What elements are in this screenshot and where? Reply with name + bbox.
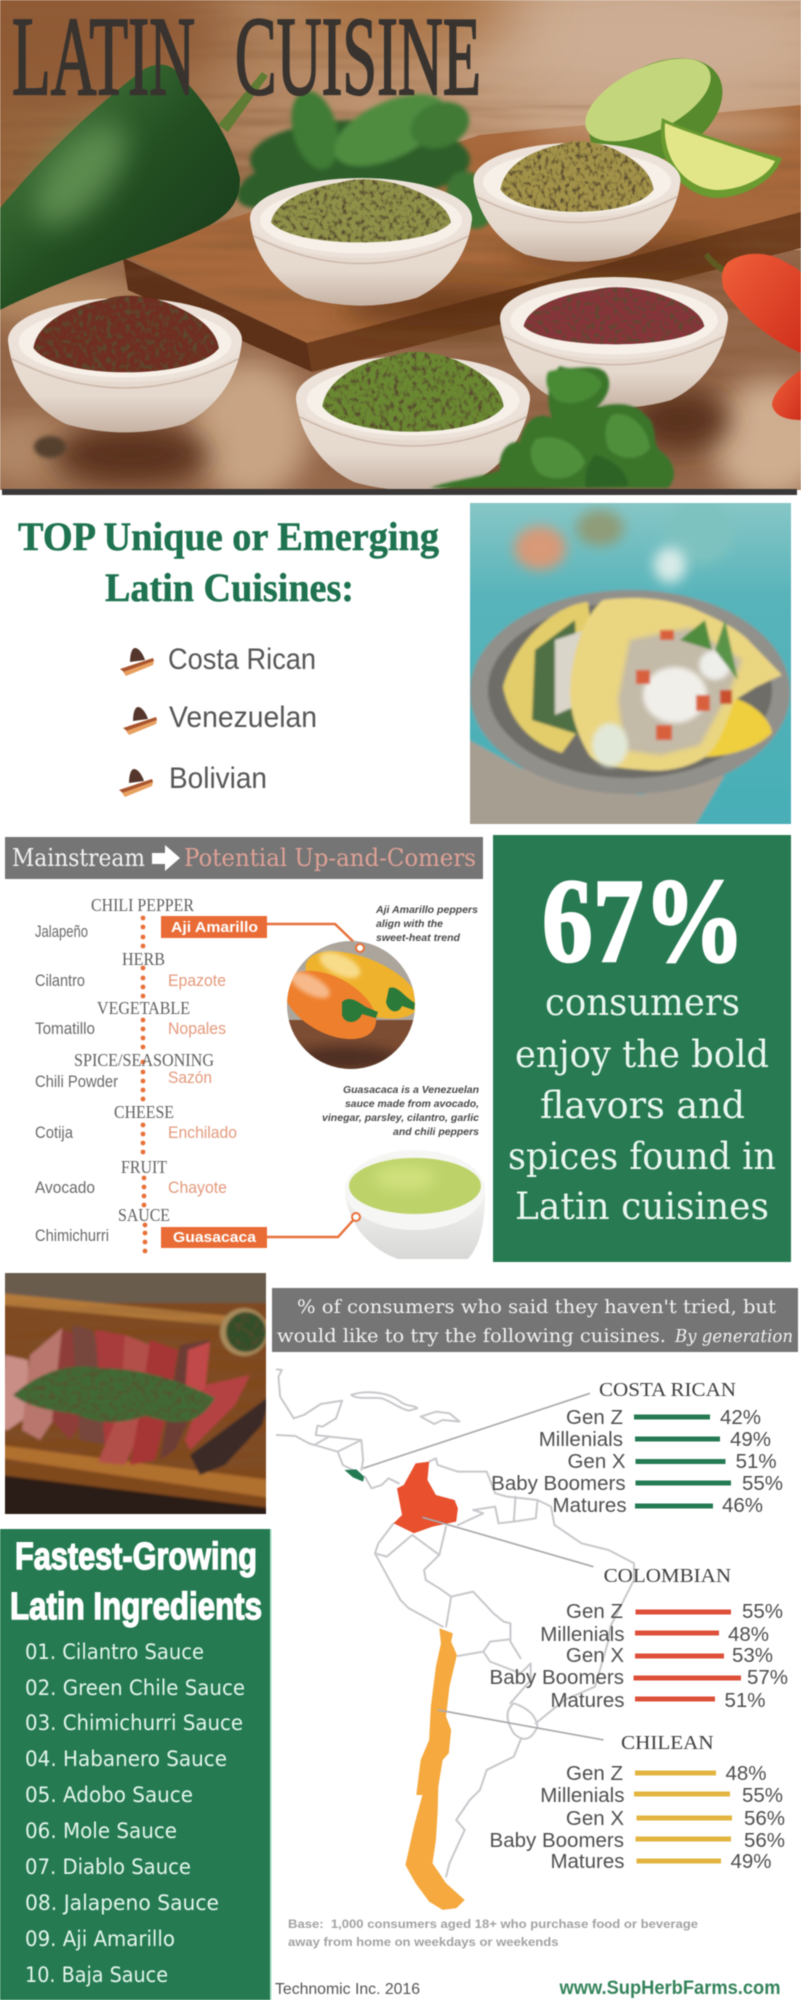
- list: emerging cuisines: [119, 643, 317, 797]
- annotation: Guasacaca: sauce made from avocado,: [345, 1098, 479, 1110]
- item: Venezuelan: Venezuelan: [169, 701, 317, 734]
- lime half: [584, 58, 724, 160]
- mainstream ingredient column: Avocado: [35, 1178, 95, 1197]
- arrow icon: [152, 845, 180, 871]
- stat caption: spices found in: [508, 1135, 776, 1178]
- chart: Colombian: Baby Boomers: [490, 1666, 624, 1689]
- ranked list: 03. Chimichurri Sauce: [25, 1711, 243, 1735]
- up-and-comer ingredient column: Enchilado: [168, 1123, 237, 1142]
- icon: sombrero 3: [119, 769, 153, 797]
- chart: Costa Rican: Gen Z: [566, 1406, 623, 1429]
- annotation: Aji Amarillo: [375, 904, 478, 944]
- item: Costa Rican: Costa Rican: [168, 643, 316, 676]
- lime wedge: [661, 118, 782, 198]
- header bar: consumers by generation: would like to try the following cuisines.: [277, 1325, 666, 1347]
- chart: Chilean: Millenials: [540, 1784, 624, 1807]
- chart: Colombian: 53%: [732, 1644, 773, 1667]
- chart: Costa Rican: 55%: [742, 1472, 783, 1495]
- herb leaves behind bowls: [236, 88, 490, 232]
- heading: top unique or emerging cuisines: [18, 514, 439, 610]
- cilantro sprig: [430, 366, 674, 488]
- chart: Chilean: 49%: [730, 1850, 772, 1873]
- bowl: bottom green sauce: [296, 352, 530, 490]
- bowl: right chili sauce: [500, 277, 728, 408]
- mainstream ingredient column: [35, 922, 118, 1245]
- header bar: mainstream to up-and-comers: Potential Up-and-Comers: [184, 844, 476, 872]
- chart: Costa Rican: 42%: [720, 1406, 761, 1429]
- icon: sombrero 1: [120, 648, 154, 676]
- chart: Costa Rican: Matures: [553, 1494, 627, 1517]
- Costa Rica highlighted: [344, 1469, 364, 1482]
- dotted timeline: [141, 916, 147, 1253]
- category labels: SAUCE: [118, 1205, 170, 1225]
- chart: Costa Rican: Baby Boomers: [491, 1472, 626, 1495]
- poblano pepper: [0, 65, 268, 310]
- ranked list: 01. Cilantro Sauce: [25, 1640, 204, 1664]
- up-and-comer ingredient column: Epazote: [168, 971, 226, 990]
- wooden board: [123, 105, 801, 372]
- chart: Costa Rican: 49%: [730, 1428, 771, 1451]
- annotation: Guasacaca: Guasacaca is a Venezuelan: [343, 1084, 479, 1096]
- category labels: FRUIT: [121, 1157, 167, 1177]
- ranked list: 02. Green Chile Sauce: [25, 1676, 245, 1700]
- annotation: Aji Amarillo: sweet-heat trend: [376, 932, 461, 944]
- chart: Costa Rican: 46%: [722, 1494, 763, 1517]
- stat number: 67%: [542, 854, 745, 987]
- map: Latin America: [277, 1369, 634, 1910]
- chart: Costa Rican: Gen X: [567, 1450, 626, 1473]
- chart: Colombian: 55%: [742, 1600, 783, 1623]
- mainstream ingredient column: Tomatillo: [35, 1019, 95, 1038]
- annotation: Guasacaca: and chili peppers: [393, 1126, 479, 1138]
- title: LATIN CUISINE: [12, 18, 480, 97]
- base note: Base: 1,000 consumers aged 18+ who purchase food or beverage: [288, 1919, 698, 1931]
- leader lines: [363, 1393, 604, 1740]
- category labels: [74, 895, 214, 1225]
- callout: Aji Amarillo: [161, 916, 360, 948]
- chart: Chilean: CHILEAN: [621, 1732, 714, 1754]
- stat caption: [508, 981, 776, 1228]
- up-and-comer ingredient column: Chayote: [168, 1178, 227, 1197]
- chart: Chilean: [490, 1732, 785, 1873]
- chart: Colombian: 57%: [747, 1666, 788, 1689]
- ranked list: 05. Adobo Sauce: [25, 1783, 193, 1807]
- stat caption: consumers: [545, 981, 740, 1024]
- panel heading: Latin Ingredients: [10, 1586, 262, 1628]
- up-and-comer ingredient column: Nopales: [168, 1019, 226, 1038]
- header bar: mainstream to up-and-comers: Mainstream: [12, 844, 145, 872]
- Colombia highlighted: [394, 1462, 458, 1533]
- ranked list: [25, 1640, 245, 1987]
- chart: Costa Rican: [491, 1379, 783, 1517]
- up-and-comer ingredient column: Sazón: [168, 1068, 212, 1087]
- bowl: top right: [474, 141, 680, 262]
- chart: Chilean: 56%: [744, 1807, 785, 1830]
- chart: Chilean: 56%: [744, 1829, 785, 1852]
- mainstream ingredient column: Cilantro: [35, 971, 85, 990]
- chart: Chilean: Gen Z: [566, 1762, 623, 1785]
- hero photo: sauces on a wooden board: [0, 0, 801, 502]
- chart: Colombian: Millenials: [540, 1623, 624, 1646]
- header bar: mainstream to up-and-comers: [5, 837, 483, 879]
- chart: Costa Rican: COSTA RICAN: [599, 1379, 736, 1401]
- table surface: [0, 0, 801, 502]
- photo: bowl of guasacaca: [345, 1150, 485, 1259]
- category labels: CHEESE: [114, 1102, 174, 1122]
- icon: sombrero 2: [123, 707, 157, 735]
- annotation: Guasacaca: vinegar, parsley, cilantro, garlic: [322, 1112, 479, 1124]
- ranked list: 04. Habanero Sauce: [25, 1747, 227, 1771]
- header bar: consumers by generation: [272, 1288, 798, 1352]
- panel heading: [10, 1536, 262, 1628]
- website: www.SupHerbFarms.com: [559, 1978, 780, 1999]
- mainstream ingredient column: Chimichurri: [35, 1226, 109, 1245]
- header bar: consumers by generation: % of consumers who said they haven't tried, but: [297, 1296, 776, 1318]
- callout: Aji Amarillo: Aji Amarillo: [171, 919, 258, 936]
- mainstream ingredient column: Cotija: [35, 1123, 73, 1142]
- base note: away from home on weekdays or weekends: [288, 1937, 558, 1949]
- callout marker: pepper: [356, 944, 364, 952]
- chart: Colombian: Matures: [550, 1689, 624, 1712]
- chart: Colombian: Gen Z: [566, 1600, 623, 1623]
- mainstream ingredient column: Chili Powder: [35, 1072, 118, 1091]
- chart: Colombian: Gen X: [566, 1644, 624, 1667]
- photo: peppers in circle: [286, 940, 416, 1070]
- category labels: CHILI PEPPER: [91, 895, 194, 915]
- red peppers: [704, 252, 801, 420]
- ranked list: 10. Baja Sauce: [25, 1963, 168, 1987]
- ranked list: 08. Jalapeno Sauce: [25, 1891, 219, 1915]
- item: Bolivian: Bolivian: [169, 762, 267, 795]
- annotation: Aji Amarillo: Aji Amarillo peppers: [375, 904, 478, 916]
- panel: 67% stat: [493, 835, 791, 1262]
- dark divider bar: [2, 489, 797, 495]
- annotation: Guasacaca: [322, 1084, 479, 1138]
- photo: sliced steak with chimichurri: [0, 1268, 271, 1519]
- category labels: HERB: [122, 949, 165, 969]
- source credit: Technomic Inc. 2016: [275, 1981, 420, 1998]
- bowl: left dark sauce: [8, 296, 242, 432]
- heading: top unique or emerging cuisines: TOP Unique or Emerging: [18, 514, 439, 559]
- chart: Colombian: COLOMBIAN: [604, 1565, 731, 1587]
- chart: Chilean: Baby Boomers: [490, 1829, 624, 1852]
- header bar: consumers by generation: By generation: [674, 1326, 793, 1347]
- chart: Chilean: Matures: [550, 1850, 624, 1873]
- chart: Chilean: 48%: [726, 1762, 767, 1785]
- stat caption: flavors and: [540, 1084, 745, 1127]
- chart: Chilean: Gen X: [566, 1807, 624, 1830]
- chart: Colombian: 51%: [724, 1689, 766, 1712]
- Chile highlighted: [405, 1628, 465, 1910]
- heading: top unique or emerging cuisines: Latin Cuisines:: [105, 565, 354, 610]
- panel heading: Fastest-Growing: [15, 1536, 257, 1578]
- ranked list: 06. Mole Sauce: [25, 1819, 177, 1843]
- chart: Costa Rican: Millenials: [539, 1428, 623, 1451]
- category labels: SPICE/SEASONING: [74, 1050, 214, 1070]
- callout: Guasacaca: Guasacaca: [173, 1229, 257, 1246]
- stat caption: Latin cuisines: [515, 1185, 769, 1228]
- up-and-comer ingredient column: [168, 971, 237, 1197]
- bowl: centre: [250, 178, 472, 306]
- chart: Colombian: [490, 1565, 788, 1712]
- stat caption: enjoy the bold: [515, 1033, 769, 1076]
- ranked list: 09. Aji Amarillo: [25, 1927, 175, 1951]
- photo: tacos on a plate: [469, 502, 792, 825]
- chart: Chilean: 55%: [742, 1784, 783, 1807]
- callout: Guasacaca: [161, 1213, 360, 1248]
- mainstream ingredient column: Jalapeño: [35, 922, 88, 941]
- chart: Costa Rican: 51%: [736, 1450, 777, 1473]
- ranked list: 07. Diablo Sauce: [25, 1855, 191, 1879]
- panel: fastest-growing ingredients: [0, 1529, 272, 2000]
- category labels: VEGETABLE: [97, 998, 190, 1018]
- annotation: Aji Amarillo: align with the: [376, 918, 443, 930]
- chart: Colombian: 48%: [728, 1623, 769, 1646]
- base note: [288, 1919, 698, 1949]
